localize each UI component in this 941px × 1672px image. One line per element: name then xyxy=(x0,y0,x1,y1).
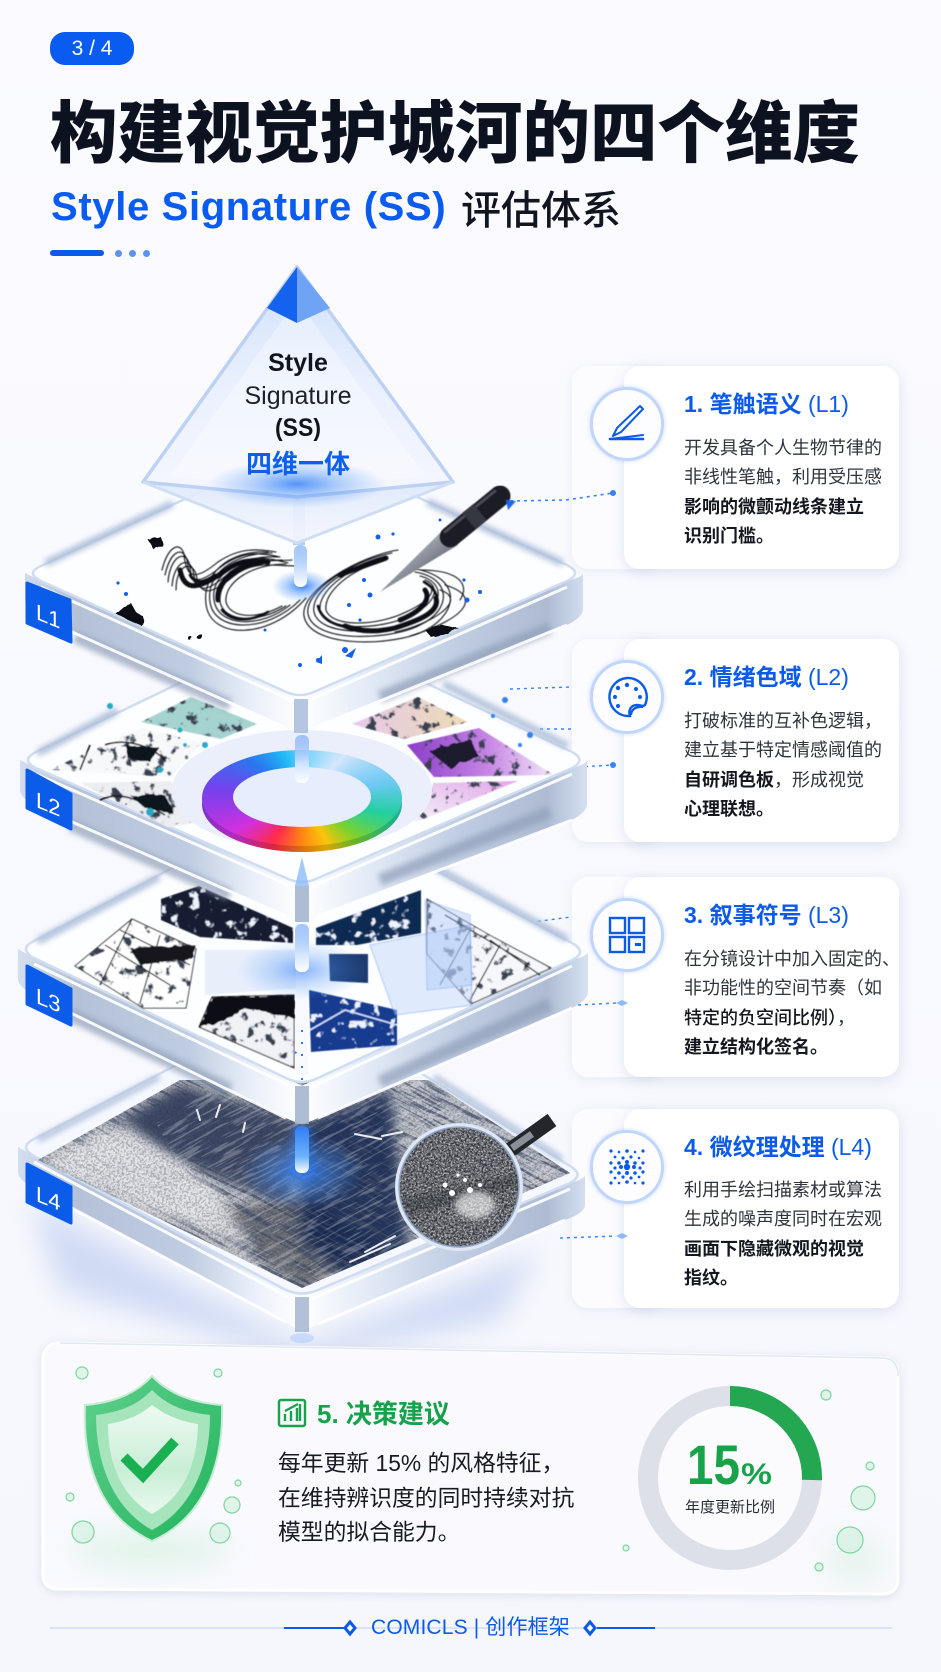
card text: 在分镜设计中加入固定的、 xyxy=(684,949,900,969)
card text: 影响的微颤动线条建立 xyxy=(684,497,864,517)
icon: dot matrix xyxy=(590,1130,664,1204)
accent dash xyxy=(50,250,104,256)
badge: L4 xyxy=(27,1164,71,1223)
card text: 打破标准的互补色逻辑， xyxy=(684,711,882,731)
layered glass stack illustration xyxy=(18,265,902,1636)
card text: 画面下隐藏微观的视觉 xyxy=(684,1239,864,1259)
colour disc xyxy=(172,730,432,856)
card: 4 micro texture xyxy=(574,1106,903,1316)
ink brush strokes xyxy=(162,547,465,642)
card text: 建立基于特定情感阈值的 xyxy=(684,740,882,760)
card: 2 emotional gamut xyxy=(574,636,903,850)
badge: L3: L3 xyxy=(36,983,60,1018)
bubbles xyxy=(66,1367,875,1571)
slab L2 xyxy=(20,679,587,922)
ink blots xyxy=(116,536,458,640)
footer label: COMICLS | 创作框架 xyxy=(371,1616,570,1639)
badge: L2 xyxy=(27,770,71,829)
donut chart: 15%: % xyxy=(741,1458,772,1491)
badge: L3 xyxy=(27,966,71,1025)
card text xyxy=(684,1180,882,1288)
beam xyxy=(293,485,308,733)
badge: L4: L4 xyxy=(36,1181,61,1216)
card heading: 3. 叙事符号 (L3) xyxy=(684,902,849,928)
card text: 非功能性的空间节奏（如 xyxy=(684,978,882,998)
connector: L4 xyxy=(560,1233,628,1239)
card text: 非线性笔触，利用受压感 xyxy=(684,467,882,487)
decision text xyxy=(278,1450,575,1545)
blue splatter xyxy=(116,518,482,667)
card heading: 1. 笔触语义 (L1) xyxy=(684,391,849,417)
icon: shield xyxy=(85,1376,222,1541)
card text: 识别门槛。 xyxy=(684,526,774,546)
icon: ink pen xyxy=(380,491,516,592)
teal splashes xyxy=(107,703,227,816)
beam xyxy=(295,735,309,922)
manga panels xyxy=(74,886,552,1070)
card text: 特定的负空间比例）， xyxy=(684,1008,855,1028)
pyramid label: Style xyxy=(268,349,328,377)
footer rule xyxy=(50,1622,892,1634)
slab L4 xyxy=(18,1065,585,1343)
white highlights xyxy=(197,1105,402,1262)
card text xyxy=(684,438,882,546)
card text: 指纹。 xyxy=(684,1268,738,1288)
manga and colour panels xyxy=(40,690,560,830)
card heading: 4. 微纹理处理 (L4) xyxy=(684,1134,872,1160)
card text: 开发具备个人生物节律的 xyxy=(684,438,882,458)
subtitle xyxy=(51,178,621,236)
card text: 利用手绘扫描素材或算法 xyxy=(684,1180,882,1200)
badge: L1 xyxy=(27,583,71,642)
card text: 生成的噪声度同时在宏观 xyxy=(684,1209,882,1229)
badge: L2: L2 xyxy=(36,787,60,822)
page badge: 3 / 4 xyxy=(50,32,134,65)
page badge: 3 / 4: 3 / 4 xyxy=(72,37,112,60)
icon: chart xyxy=(279,1400,305,1426)
pyramid label: Signature xyxy=(244,382,352,410)
beam xyxy=(295,924,309,1124)
donut chart: 15% xyxy=(648,1396,812,1560)
icon: pen xyxy=(590,387,664,461)
pyramid label: (SS) xyxy=(275,414,321,442)
pyramid xyxy=(143,267,453,543)
connector: L1 xyxy=(510,490,616,501)
card text xyxy=(684,711,882,819)
shadow under stack xyxy=(30,1200,540,1360)
beam xyxy=(290,1126,314,1343)
decision text: 模型的拟合能力。 xyxy=(278,1519,460,1545)
blue splashes xyxy=(491,697,533,747)
decision heading: 5. 决策建议 xyxy=(317,1399,450,1429)
decision text: 每年更新 15% 的风格特征， xyxy=(278,1450,564,1476)
pyramid label xyxy=(244,349,352,479)
pyramid label: 四维一体 xyxy=(246,449,350,479)
texture surface xyxy=(38,1080,570,1288)
cap xyxy=(267,267,330,323)
icon: palette xyxy=(590,660,664,734)
card text: 自研调色板，形成视觉 xyxy=(684,770,864,790)
panel: decision advice xyxy=(43,1343,898,1594)
title: 构建视觉护城河的四个维度 xyxy=(50,80,860,177)
slab L3 xyxy=(18,868,588,1124)
subtitle: 评估体系 xyxy=(461,178,621,236)
decision text: 在维持辨识度的同时持续对抗 xyxy=(278,1485,575,1511)
card text xyxy=(684,949,900,1057)
card text: 心理联想。 xyxy=(684,799,774,819)
connector: L2 xyxy=(510,687,616,768)
badge: L1: L1 xyxy=(36,599,60,634)
card: 1 brush semantics xyxy=(574,363,903,578)
donut chart: 15%: 年度更新比例 xyxy=(685,1499,775,1516)
connector: L3 xyxy=(510,917,628,1006)
donut chart: 15%: 15 xyxy=(687,1433,740,1496)
card: 3 narrative symbols xyxy=(574,874,903,1086)
accent dots xyxy=(115,250,150,257)
card heading: 2. 情绪色域 (L2) xyxy=(684,664,849,690)
card text: 建立结构化签名。 xyxy=(684,1037,828,1057)
glow point xyxy=(272,570,332,602)
icon: magnifier xyxy=(395,1120,552,1250)
slab L1 xyxy=(25,448,583,733)
subtitle: Style Signature (SS) xyxy=(51,185,446,229)
icon: panel grid xyxy=(590,898,664,972)
